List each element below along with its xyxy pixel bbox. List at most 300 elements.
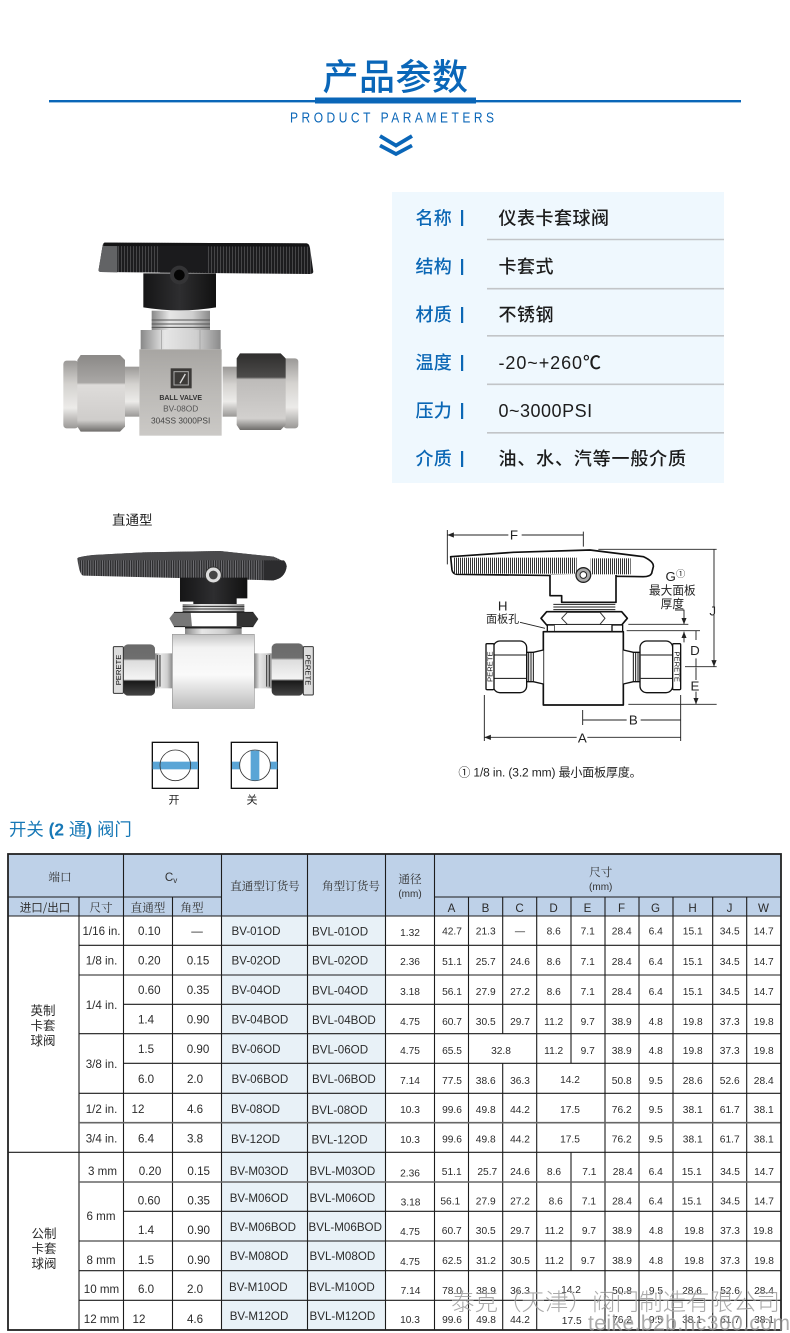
dimension row 7: 17.5 xyxy=(560,1105,580,1116)
Cv values angle: 2.0 xyxy=(187,1073,203,1086)
dimension letters: D xyxy=(549,902,558,915)
table header labels: 通径 xyxy=(398,871,422,887)
bore values: 7.14 xyxy=(400,1076,420,1087)
Cv values angle xyxy=(187,925,210,1326)
dimension row 8: 61.7 xyxy=(720,1134,740,1146)
dimension row 1: 21.3 xyxy=(476,926,496,938)
dimension row 3 xyxy=(442,987,774,998)
table header labels: 直通型 xyxy=(131,900,166,916)
table header labels: 端口 xyxy=(48,869,72,885)
dimension row 1: 28.4 xyxy=(612,926,632,938)
row: structure: 卡套式 xyxy=(498,257,554,277)
dimension row 2: 25.7 xyxy=(476,957,496,968)
dimension row 14: 9.5 xyxy=(649,1315,663,1326)
dimension row 7: 9.5 xyxy=(649,1105,663,1116)
body markings: 304SS 3000PSI xyxy=(151,416,210,426)
dimension row 11: 60.7 xyxy=(442,1226,462,1237)
neck xyxy=(152,311,210,331)
dimension row 9: 51.1 xyxy=(442,1167,462,1178)
row: structure: 结构 xyxy=(416,257,452,277)
threads xyxy=(183,604,244,613)
port sizes: 1/16 in. xyxy=(82,925,121,938)
dimension row 7: 76.2 xyxy=(612,1105,632,1116)
angle order numbers: BVL-M12OD xyxy=(310,1310,375,1323)
dimension row 13: 50.8 xyxy=(612,1286,632,1297)
dimension row 2: 51.1 xyxy=(442,957,462,968)
Cv values straight: 6.4 xyxy=(138,1132,155,1146)
dimension letters: A xyxy=(448,902,456,915)
dimension row 3: 6.4 xyxy=(649,987,663,998)
dimension row 3: 28.4 xyxy=(612,987,632,998)
bore values: 4.75 xyxy=(400,1017,420,1028)
dimension row 11: 38.9 xyxy=(612,1226,632,1237)
left fitting xyxy=(486,641,543,693)
dimension row 7: 61.7 xyxy=(720,1105,740,1116)
dimension row 13 xyxy=(442,1285,774,1297)
dimension row 9 xyxy=(442,1167,774,1178)
row label: metric: 卡套 xyxy=(31,1241,57,1256)
bore values: 4.75 xyxy=(400,1227,420,1238)
dimension row 4: 9.7 xyxy=(581,1017,595,1028)
angle order numbers: BVL-02OD xyxy=(312,954,368,968)
dimension row 9: 14.7 xyxy=(754,1167,774,1178)
dimension row 10: 8.6 xyxy=(549,1196,563,1208)
dimension row 6: 28.4 xyxy=(754,1076,774,1087)
footnote: ① 1/8 in. (3.2 mm) 最小面板厚度。 xyxy=(458,764,642,779)
handle outline xyxy=(451,550,653,577)
caption: straight type: 直通型 xyxy=(112,513,152,528)
row: temperature: 温度 xyxy=(416,353,452,373)
dimension row 4: 19.8 xyxy=(683,1017,703,1028)
dimension row 5: 19.8 xyxy=(754,1046,774,1057)
port sizes: 3/4 in. xyxy=(86,1132,117,1146)
dimension letters xyxy=(448,902,769,915)
dimension row 11: 37.3 xyxy=(720,1226,740,1237)
panel nut xyxy=(541,612,627,625)
dimension row 8: 9.5 xyxy=(649,1134,663,1146)
dimension row 7: 38.1 xyxy=(754,1105,774,1116)
table header labels: 尺寸 xyxy=(89,900,113,916)
dimension row 4: 38.9 xyxy=(612,1017,632,1028)
dimension row 2 xyxy=(442,957,774,968)
Cv values angle: 0.15 xyxy=(187,1165,210,1178)
Cv values angle: 4.6 xyxy=(187,1103,203,1116)
stem outline xyxy=(550,575,616,602)
dimension row 13: 38.9 xyxy=(476,1286,496,1297)
Cv values straight: 6.0 xyxy=(138,1283,154,1296)
dimension row 3: 27.9 xyxy=(476,987,496,998)
port sizes xyxy=(82,925,121,1326)
dimension row 8: 38.1 xyxy=(754,1134,774,1146)
body markings: BALL VALVE xyxy=(159,395,202,402)
dimension row 5: 4.8 xyxy=(649,1046,663,1057)
Cv values angle: 0.35 xyxy=(187,984,209,997)
dimension row 6: 77.5 xyxy=(442,1076,462,1087)
dimension row 8: 38.1 xyxy=(683,1134,703,1146)
set screw xyxy=(205,567,221,583)
right fitting xyxy=(623,641,681,693)
subtitle: PRODUCT PARAMETERS xyxy=(290,109,498,126)
dimension row 9: 34.5 xyxy=(720,1167,740,1178)
Cv values angle: 0.15 xyxy=(187,954,209,968)
dimension row 3: 14.7 xyxy=(754,987,774,998)
angle order numbers: BVL-06BOD xyxy=(312,1073,376,1086)
dimension row 1: — xyxy=(515,926,526,938)
row label: metric: 球阀 xyxy=(31,1257,57,1271)
Cv values angle: — xyxy=(191,925,203,938)
dimension row 6: 28.6 xyxy=(683,1076,703,1087)
dimension row 13: 14.2 xyxy=(561,1285,581,1296)
table header labels xyxy=(20,864,613,916)
table header labels: 角型 xyxy=(180,900,204,916)
port sizes: 8 mm xyxy=(87,1254,115,1267)
port sizes: 1/4 in. xyxy=(86,999,117,1012)
dimension row 4: 4.8 xyxy=(649,1017,663,1028)
dimension row 14: 61.7 xyxy=(720,1315,740,1326)
Cv values straight: 0.10 xyxy=(138,925,161,938)
dimension row 14: 17.5 xyxy=(562,1316,582,1327)
Cv values angle: 0.90 xyxy=(187,1014,209,1026)
row: material: 不锈钢 xyxy=(498,305,554,325)
row: structure xyxy=(416,257,554,277)
dimension labels: 最大面板 xyxy=(649,583,696,597)
table header labels: 尺寸 xyxy=(589,864,613,880)
left fitting: PERETE xyxy=(114,655,123,685)
row: medium: 油、水、汽等一般介质 xyxy=(498,449,686,469)
neck xyxy=(547,625,623,632)
dimension row 1: 42.7 xyxy=(442,926,462,938)
Cv values straight: 1.4 xyxy=(138,1014,155,1026)
angle order numbers xyxy=(308,926,382,1323)
dimension letters: C xyxy=(515,902,524,915)
dimension row 8: 99.6 xyxy=(442,1134,462,1146)
dimension row 2: 34.5 xyxy=(720,957,740,968)
port sizes: 6 mm xyxy=(87,1210,115,1223)
dimension row 11: 19.8 xyxy=(753,1226,773,1237)
Cv values angle: 0.35 xyxy=(187,1194,210,1208)
dimension row 2: 14.7 xyxy=(754,957,774,968)
bore values: 2.36 xyxy=(400,1168,420,1180)
row label: metric xyxy=(31,1227,57,1271)
dimension row 6 xyxy=(442,1075,774,1087)
straight order numbers: BV-04OD xyxy=(232,984,280,997)
dimension row 8: 44.2 xyxy=(510,1134,530,1146)
dimension row 6: 52.6 xyxy=(720,1076,740,1087)
dimension row 12: 37.3 xyxy=(720,1256,740,1267)
dimension row 3: 27.2 xyxy=(510,987,530,998)
dimension labels: ① xyxy=(676,569,685,579)
dimension row 12: 11.2 xyxy=(545,1256,564,1267)
row: name: 名称 xyxy=(416,208,452,228)
dimension row 6: 36.3 xyxy=(510,1076,530,1087)
dimension row 2: 6.4 xyxy=(649,957,663,968)
dimension row 14: 76.2 xyxy=(612,1315,632,1326)
dimension letters: B xyxy=(482,902,490,915)
dimension row 14: 44.2 xyxy=(510,1315,530,1326)
dimension row 4: 29.7 xyxy=(510,1017,530,1028)
dimension row 10: 27.9 xyxy=(476,1196,496,1208)
dimension row 3: 56.1 xyxy=(442,987,462,998)
angle order numbers: BVL-M03OD xyxy=(310,1165,375,1178)
straight order numbers: BV-M08OD xyxy=(230,1250,288,1263)
straight order numbers xyxy=(229,925,296,1323)
dimension row 13: 28.6 xyxy=(682,1286,702,1297)
bore values: 10.3 xyxy=(400,1135,420,1146)
bore values: 3.18 xyxy=(400,987,420,998)
panel nut xyxy=(169,612,258,627)
straight order numbers: BV-M12OD xyxy=(230,1310,288,1323)
dimension labels: B xyxy=(629,713,638,728)
Cv values angle: 0.90 xyxy=(187,1254,210,1267)
row label: imperial: 球阀 xyxy=(30,1034,56,1048)
port sizes: 3 mm xyxy=(88,1165,117,1178)
left fitting xyxy=(63,355,139,432)
angle order numbers: BVL-08OD xyxy=(312,1104,368,1117)
row: medium: 介质 xyxy=(416,449,452,469)
straight order numbers: BV-M03OD xyxy=(230,1165,288,1178)
dimension row 12: 30.5 xyxy=(510,1256,530,1267)
body markings xyxy=(151,395,210,426)
dimension row 10: 27.2 xyxy=(510,1196,530,1208)
straight order numbers: BV-06BOD xyxy=(232,1073,288,1086)
dimension row 9: 6.4 xyxy=(649,1167,663,1178)
dimension row 4: 37.3 xyxy=(720,1017,740,1028)
illustration: straight valve xyxy=(77,551,313,807)
order number column background xyxy=(222,916,386,1330)
dimension lines xyxy=(447,530,717,741)
dimension row 14: 99.6 xyxy=(442,1315,462,1326)
dimension row 12: 19.8 xyxy=(754,1256,774,1267)
straight order numbers: BV-06OD xyxy=(232,1043,280,1056)
table xyxy=(8,854,781,1330)
dimension row 3: 15.1 xyxy=(683,987,703,998)
dimension row 2: 7.1 xyxy=(581,957,595,968)
angle order numbers: BVL-01OD xyxy=(312,926,368,938)
icon: double chevron xyxy=(380,136,412,154)
dimension row 6: 9.5 xyxy=(649,1076,663,1087)
photo: ball valve xyxy=(63,243,313,436)
panel: parameters xyxy=(392,192,724,483)
port sizes: 10 mm xyxy=(84,1283,119,1296)
dimension row 14: 38.1 xyxy=(754,1315,774,1326)
dimension row 12 xyxy=(442,1256,774,1267)
right fitting xyxy=(254,643,313,696)
port sizes: 1/8 in. xyxy=(86,954,117,968)
port sizes: 3/8 in. xyxy=(86,1058,117,1071)
table header labels: 进口/出口 xyxy=(20,900,70,916)
row: name xyxy=(416,208,610,228)
dimension row 13: 78.0 xyxy=(442,1286,462,1297)
row label: metric: 公制 xyxy=(31,1227,57,1241)
right fitting: PERETE xyxy=(304,655,313,685)
dimension row 5 xyxy=(442,1046,774,1057)
dimension row 10: 7.1 xyxy=(582,1196,596,1208)
Cv values angle: 4.6 xyxy=(187,1313,203,1326)
Cv values angle: 0.90 xyxy=(187,1043,209,1056)
dimension row 14: 49.8 xyxy=(476,1315,496,1326)
handle xyxy=(77,551,287,580)
angle order numbers: BVL-12OD xyxy=(312,1134,368,1146)
dimension row 2: 15.1 xyxy=(683,957,703,968)
dimension row 12: 62.5 xyxy=(442,1256,462,1267)
port sizes: 12 mm xyxy=(84,1313,119,1326)
bore values: 4.75 xyxy=(400,1046,420,1057)
dimension letters: H xyxy=(688,902,697,915)
dimension row 9: 15.1 xyxy=(682,1167,702,1178)
dimension row 9: 8.6 xyxy=(547,1167,561,1178)
straight order numbers: BV-M06OD xyxy=(230,1192,288,1205)
dimension row 13: 28.4 xyxy=(754,1286,774,1297)
dimension row 2: 8.6 xyxy=(547,957,561,968)
dimension labels: D xyxy=(690,643,700,658)
dimension letters: F xyxy=(618,902,625,915)
body xyxy=(172,634,254,708)
dimension row 9: 28.4 xyxy=(613,1167,633,1178)
angle order numbers: BVL-M06OD xyxy=(310,1192,375,1205)
bore values: 1.32 xyxy=(400,928,420,939)
dimension row 7: 99.6 xyxy=(442,1105,462,1116)
icon: open position xyxy=(152,742,198,807)
dimension row 4 xyxy=(442,1017,774,1028)
row label: imperial xyxy=(30,1004,56,1048)
dimension row 7: 38.1 xyxy=(683,1105,703,1116)
row: pressure xyxy=(416,401,593,421)
dimension row 10: 15.1 xyxy=(682,1196,702,1208)
dimension row 5: 11.2 xyxy=(544,1046,564,1057)
icon: open position: 开 xyxy=(168,795,179,807)
dimension row 10: 28.4 xyxy=(612,1196,632,1208)
Cv values angle: 0.90 xyxy=(187,1224,210,1237)
body xyxy=(139,349,222,436)
dimension row 8: 76.2 xyxy=(612,1134,632,1146)
Cv values straight: 0.20 xyxy=(138,954,161,968)
bore values: 7.14 xyxy=(401,1286,421,1297)
title rule xyxy=(49,98,741,104)
dimension row 7: 49.8 xyxy=(476,1105,496,1116)
left fitting xyxy=(113,644,172,696)
dimension row 8: 49.8 xyxy=(476,1134,496,1146)
table grid xyxy=(8,854,781,1330)
set screw hole xyxy=(170,266,189,284)
dimension letters: J xyxy=(727,902,732,915)
dimension row 3: 8.6 xyxy=(547,987,561,998)
table header labels: (mm) xyxy=(398,889,422,900)
table header backgrounds xyxy=(8,854,781,916)
dimension letters: G xyxy=(651,902,660,915)
Cv values straight: 0.60 xyxy=(138,984,161,997)
dimension row 1: 7.1 xyxy=(581,926,595,938)
straight order numbers: BV-M10OD xyxy=(229,1281,288,1294)
straight order numbers: BV-04BOD xyxy=(232,1014,288,1026)
dimension row 3: 7.1 xyxy=(581,987,595,998)
dimension labels: G xyxy=(665,569,676,584)
dimension row 12: 19.8 xyxy=(684,1256,704,1267)
angle order numbers: BVL-M10OD xyxy=(309,1281,375,1294)
dimension labels: 面板孔 xyxy=(486,611,519,625)
row: pressure: 0~3000PSI xyxy=(498,401,593,421)
handle xyxy=(99,243,313,274)
dimension row 10: 14.7 xyxy=(754,1196,774,1208)
dimension drawing xyxy=(447,528,717,779)
dimension labels: 厚度 xyxy=(661,597,684,611)
straight order numbers: BV-02OD xyxy=(232,954,280,968)
threads xyxy=(553,604,615,610)
set screw xyxy=(576,568,591,582)
row: temperature: -20~+260℃ xyxy=(498,353,602,373)
body markings: BV-08OD xyxy=(163,404,198,414)
dimension row 13: 52.6 xyxy=(720,1286,740,1297)
dimension row 3: 34.5 xyxy=(720,987,740,998)
Cv values straight: 6.0 xyxy=(138,1073,154,1086)
fitting markings xyxy=(485,651,681,682)
dimension row 9: 25.7 xyxy=(477,1167,498,1178)
fitting markings: PERETE xyxy=(485,651,494,682)
dimension labels: F xyxy=(510,528,518,543)
row: material xyxy=(416,305,554,325)
Cv values angle: 2.0 xyxy=(187,1283,203,1296)
dimension row 11: 11.2 xyxy=(545,1226,564,1237)
Cv values straight: 1.5 xyxy=(138,1254,154,1267)
dimension row 8: 17.5 xyxy=(560,1134,580,1146)
table header labels: 角型订货号 xyxy=(322,878,380,894)
dimension row 4: 19.8 xyxy=(754,1017,774,1028)
neck xyxy=(185,627,242,635)
dimension row 2: 24.6 xyxy=(510,957,530,968)
right fitting xyxy=(223,353,298,430)
Cv values straight: 12 xyxy=(132,1103,144,1116)
dimension row 11: 30.5 xyxy=(476,1226,496,1237)
straight order numbers: BV-12OD xyxy=(231,1133,280,1146)
dimension row 2: 28.4 xyxy=(612,957,632,968)
dimension row 9: 24.6 xyxy=(510,1167,530,1178)
fitting markings: PERETE xyxy=(672,651,681,682)
Cv values straight: 1.5 xyxy=(138,1043,154,1056)
title: 产品参数 xyxy=(322,48,469,100)
table header labels: C xyxy=(165,871,173,884)
dimension row 5: 37.3 xyxy=(720,1046,740,1057)
dimension labels: J xyxy=(709,603,716,618)
straight order numbers: BV-08OD xyxy=(231,1103,280,1116)
dimension row 11 xyxy=(442,1226,773,1237)
dimension row 7 xyxy=(442,1105,774,1116)
dimension row 14: 38.1 xyxy=(682,1315,702,1326)
table header labels: 直通型订货号 xyxy=(230,878,300,894)
dimension row 12: 38.9 xyxy=(612,1256,632,1267)
bore values: 3.18 xyxy=(401,1198,421,1208)
angle order numbers: BVL-M06BOD xyxy=(308,1221,382,1234)
dimension row 5: 38.9 xyxy=(612,1046,632,1057)
dimension labels: H xyxy=(498,598,507,613)
logo xyxy=(171,368,192,388)
bore values: 10.3 xyxy=(400,1105,420,1116)
Cv values straight: 1.4 xyxy=(138,1224,155,1237)
Cv values straight xyxy=(132,925,161,1326)
port sizes: 1/2 in. xyxy=(86,1103,117,1116)
dimension row 1: 14.7 xyxy=(754,926,774,938)
dimension row 6: 14.2 xyxy=(560,1075,580,1086)
dimension row 7: 44.2 xyxy=(510,1105,530,1116)
dimension row 10: 34.5 xyxy=(720,1196,740,1208)
section heading: 开关 (2 通) 阀门 xyxy=(9,820,132,840)
stem xyxy=(180,578,247,604)
angle order numbers: BVL-04OD xyxy=(312,984,368,998)
dimension row 10 xyxy=(440,1196,774,1208)
angle order numbers: BVL-06OD xyxy=(312,1044,368,1056)
dimension row 4: 11.2 xyxy=(544,1017,564,1028)
table header labels: (mm) xyxy=(589,882,612,893)
row: pressure: 压力 xyxy=(416,401,452,421)
dimension row 10: 6.4 xyxy=(649,1196,663,1208)
